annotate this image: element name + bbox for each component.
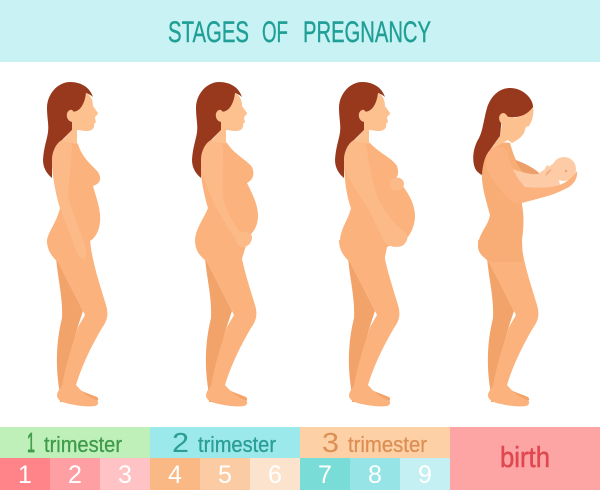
timeline xyxy=(0,427,600,490)
figure: second trimester xyxy=(192,82,258,406)
breast shade xyxy=(515,160,539,179)
torso xyxy=(478,142,539,262)
birth block: birth xyxy=(500,442,550,474)
month cells: 5 xyxy=(218,461,232,489)
hair xyxy=(473,88,533,175)
figure: third trimester xyxy=(335,82,415,406)
third trimester header: 3 xyxy=(322,427,339,458)
third trimester header xyxy=(300,427,450,458)
newborn xyxy=(508,157,576,189)
second trimester header: 2 xyxy=(172,427,189,458)
arm and hand xyxy=(200,140,252,247)
upper hand xyxy=(390,178,404,190)
arm and lower hand xyxy=(344,140,407,247)
month cells: 4 xyxy=(168,461,182,489)
month cells: 3 xyxy=(118,461,132,489)
torso xyxy=(340,139,415,262)
month cells: 1 xyxy=(18,461,32,489)
torso xyxy=(195,139,258,262)
third trimester header: trimester xyxy=(348,432,427,457)
title xyxy=(168,16,431,49)
baby crease and ear xyxy=(545,168,553,177)
title banner xyxy=(0,0,600,62)
first trimester header xyxy=(0,427,150,458)
first trimester header: 1 xyxy=(27,427,35,458)
month cells: 6 xyxy=(268,461,282,489)
mother's arm xyxy=(486,147,577,203)
month cells: 7 xyxy=(318,461,332,489)
month cells xyxy=(0,458,450,490)
baby hand xyxy=(541,164,556,182)
title: STAGES xyxy=(168,16,249,49)
month cells: 8 xyxy=(368,461,382,489)
torso xyxy=(47,139,100,262)
arm xyxy=(52,140,86,260)
second trimester header xyxy=(150,427,300,458)
title: OF xyxy=(262,16,288,49)
title: PREGNANCY xyxy=(303,16,431,49)
second trimester header: trimester xyxy=(198,432,276,457)
birth block xyxy=(450,427,600,490)
month cells: 2 xyxy=(68,461,82,489)
month cells: 9 xyxy=(418,461,432,489)
figure: mother holding newborn xyxy=(473,88,577,406)
figure: first trimester xyxy=(43,82,107,406)
first trimester header: trimester xyxy=(44,432,122,457)
face xyxy=(490,107,533,150)
